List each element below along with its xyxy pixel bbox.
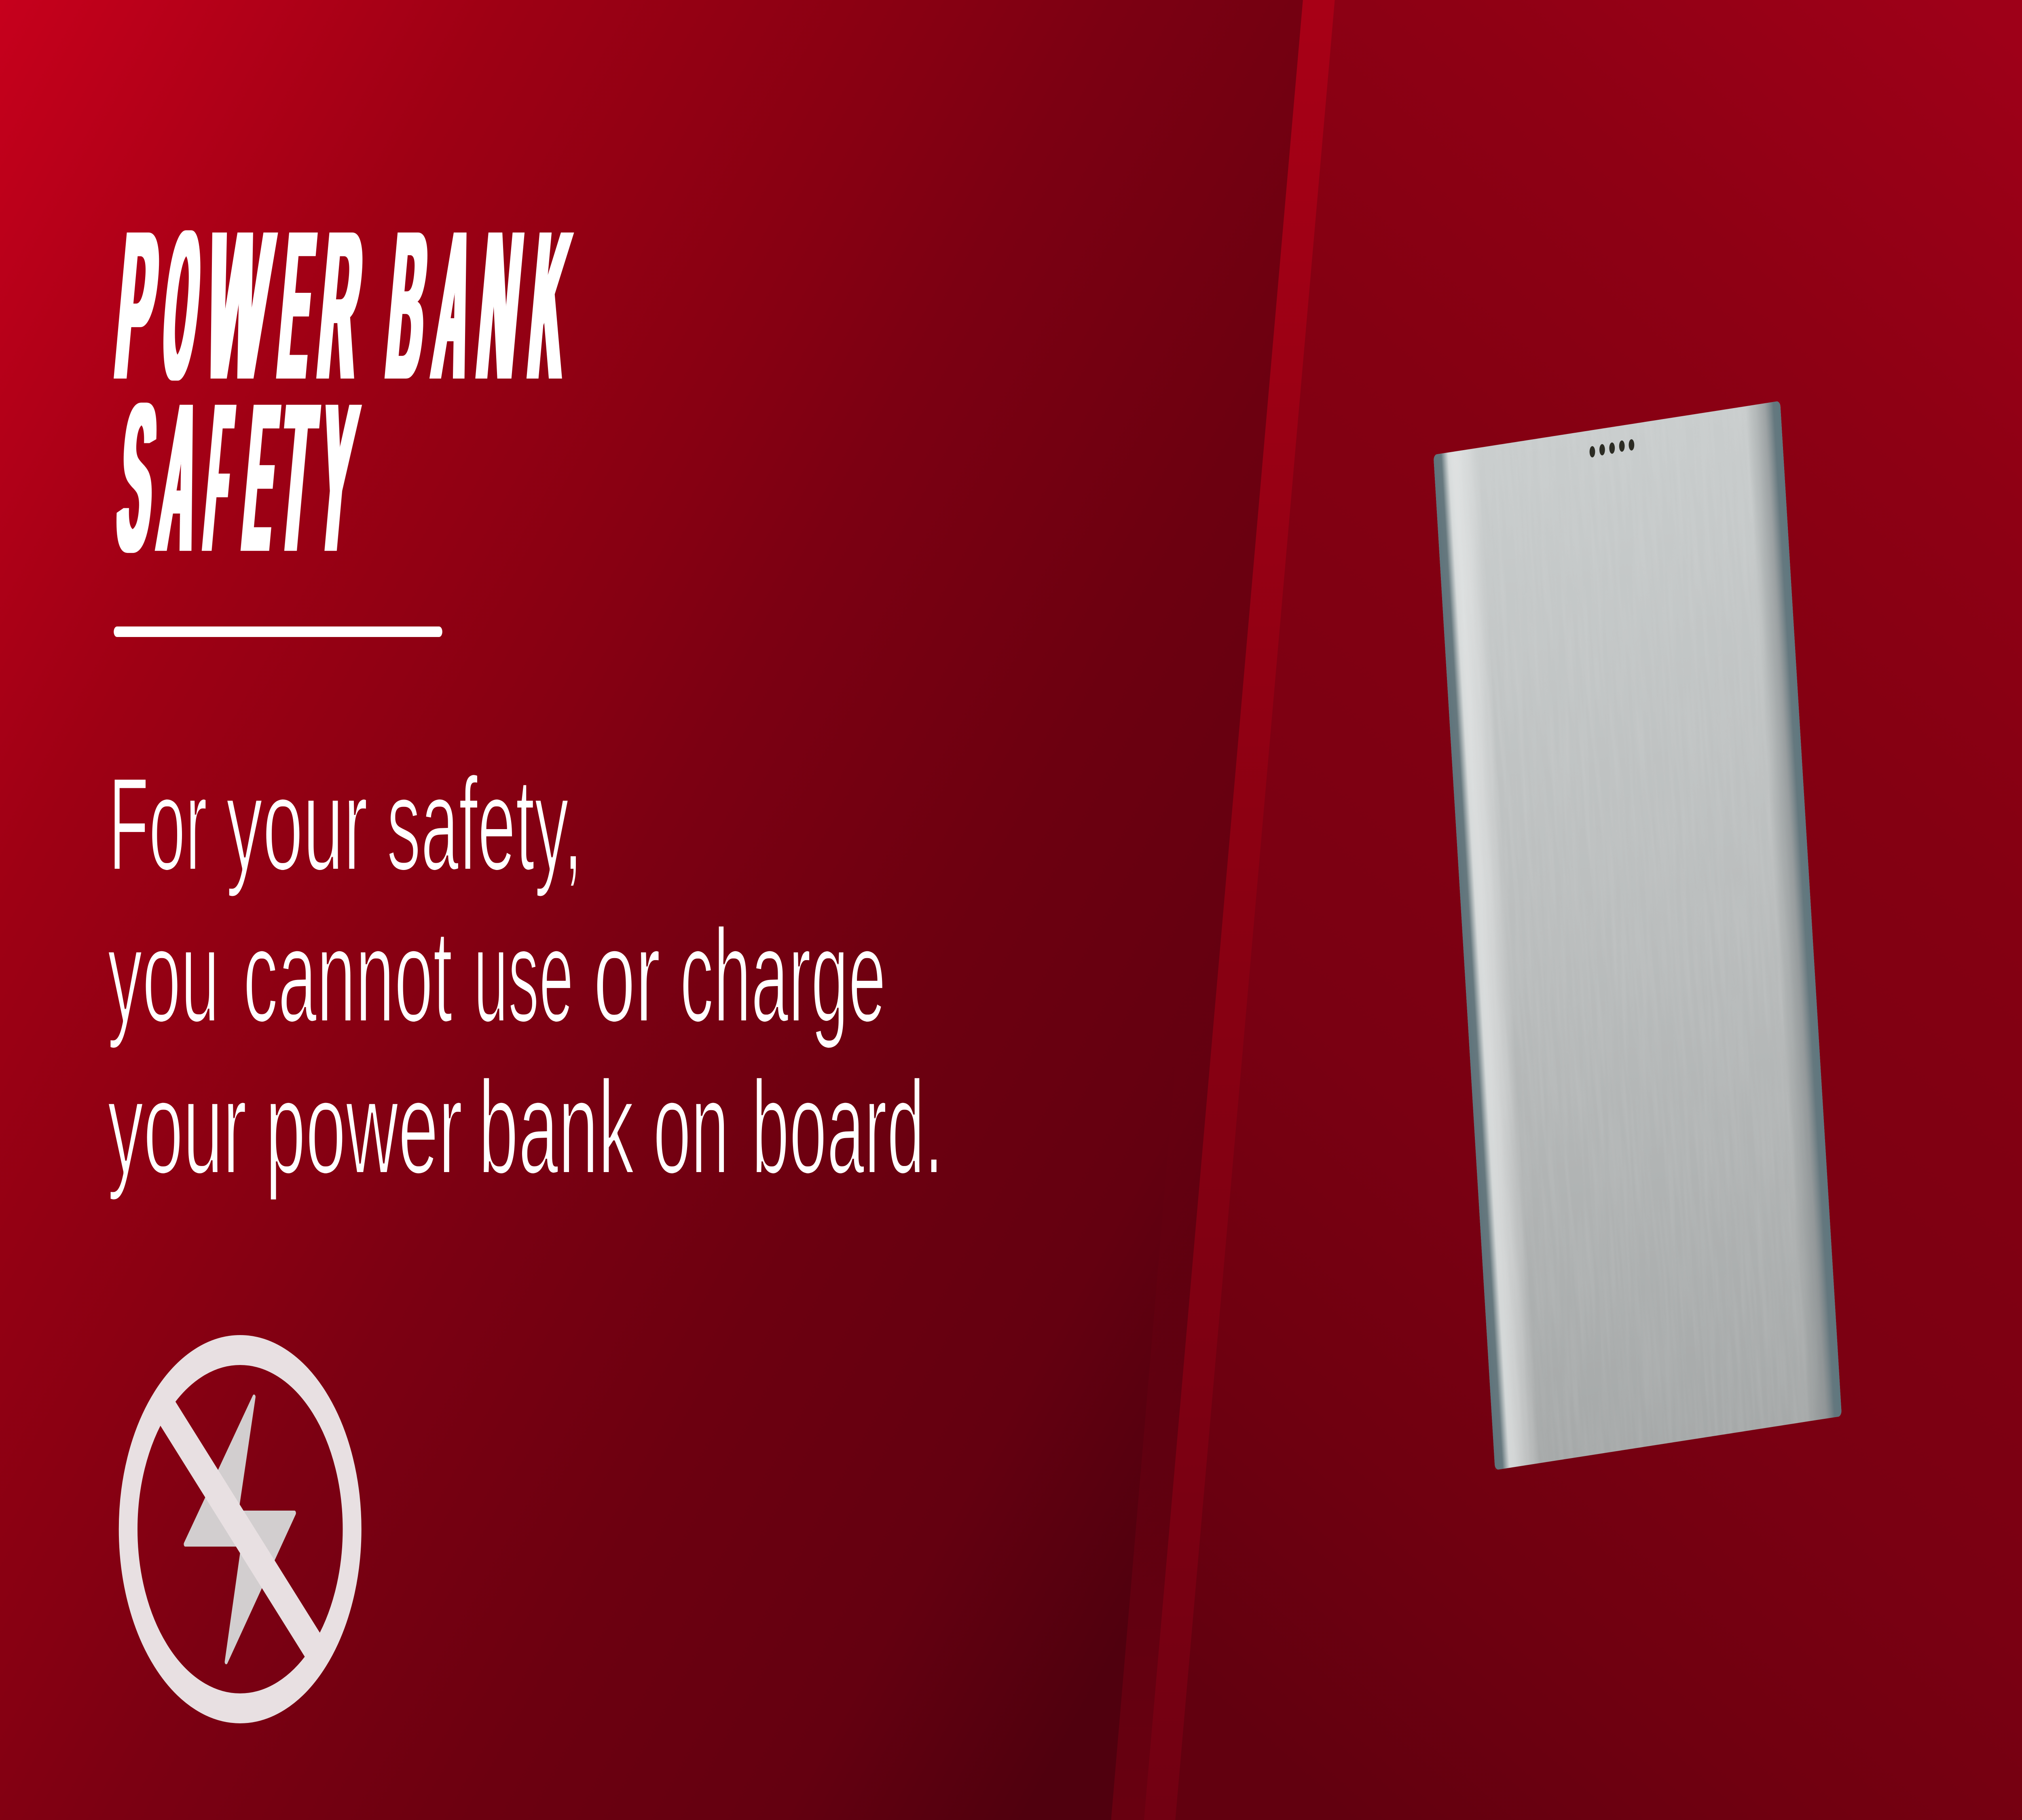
icon: no charging (crossed lightning bolt) [128, 1350, 352, 1708]
title: F [198, 359, 239, 596]
body text: your [226, 750, 368, 898]
title: N [470, 187, 530, 424]
title: B [380, 187, 436, 424]
title: W [198, 187, 280, 424]
body text: For [109, 750, 207, 898]
body text: use [474, 902, 573, 1050]
title: A [427, 187, 480, 424]
text: K [522, 187, 577, 424]
body text: board. [752, 1054, 943, 1201]
icon: LED indicator dots [1590, 439, 1634, 457]
title [109, 187, 577, 596]
body text [108, 750, 943, 1202]
title: Y [310, 359, 364, 596]
power bank device [1434, 401, 1842, 1470]
divider rule under title [114, 626, 442, 637]
body text: power [265, 1054, 463, 1202]
body text: cannot [243, 902, 453, 1050]
title: P [109, 187, 166, 424]
title: E [236, 359, 286, 596]
title: S [110, 359, 164, 596]
body text: your [108, 1054, 247, 1202]
body text: charge [680, 902, 886, 1050]
body text: you [108, 902, 219, 1050]
title: A [152, 359, 207, 596]
title: O [156, 187, 208, 424]
title: T [271, 359, 324, 596]
title: E [272, 187, 322, 424]
title: R [311, 187, 370, 424]
body text: on [653, 1054, 729, 1201]
body text: bank [478, 1054, 635, 1201]
body text: or [594, 902, 660, 1050]
body text: safety, [387, 750, 583, 898]
